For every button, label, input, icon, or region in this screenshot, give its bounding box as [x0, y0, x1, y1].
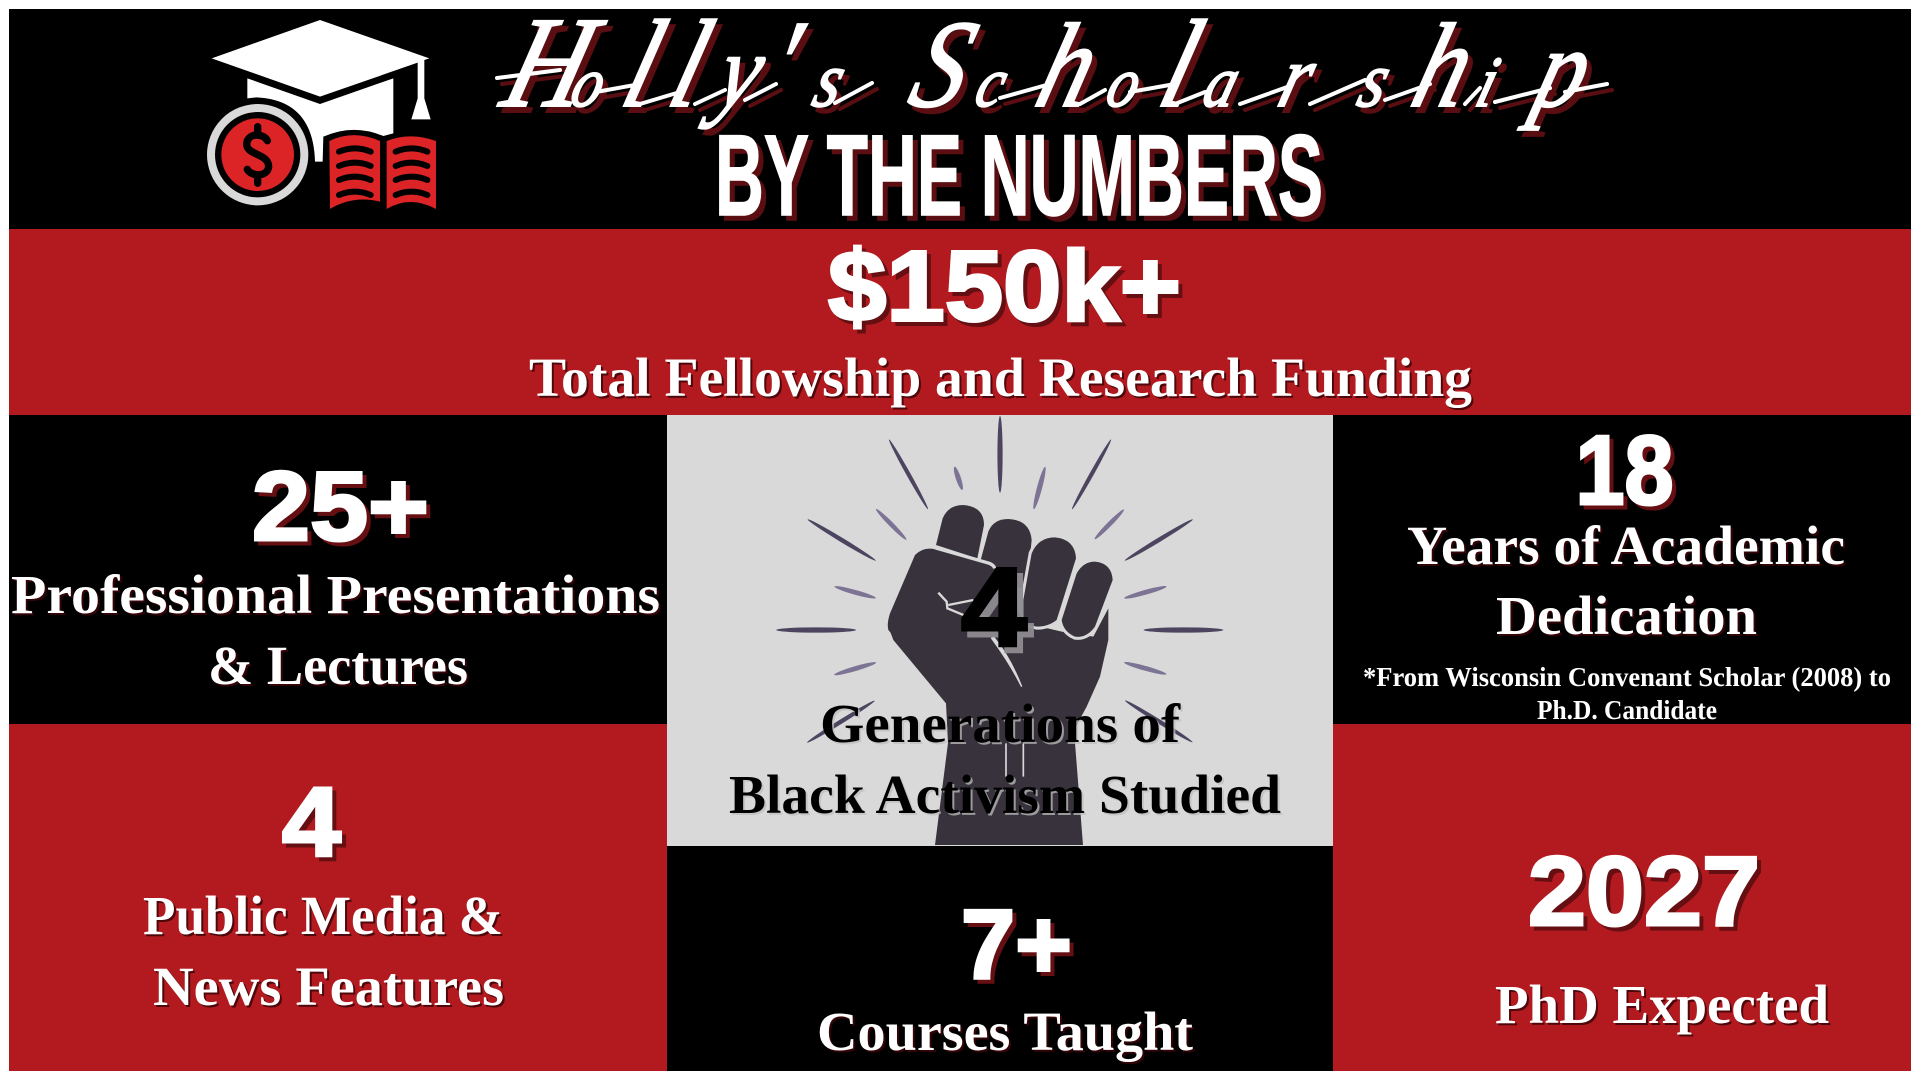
- presentations label: Professional Presentations: [11, 564, 660, 625]
- title script: r: [1269, 29, 1327, 126]
- panel: courses: [667, 846, 1333, 1071]
- courses number: 7+: [961, 889, 1072, 999]
- phd label: PhD Expected: [1495, 974, 1829, 1035]
- title script: a: [1196, 42, 1249, 122]
- phd year: 2027: [1528, 836, 1760, 946]
- panel: media: [9, 724, 667, 1071]
- title flourishes: [497, 70, 1607, 104]
- presentations label: [11, 564, 660, 696]
- years number: 18: [1576, 415, 1674, 525]
- media label: [143, 885, 504, 1017]
- title script: s: [1350, 38, 1400, 124]
- title script: y: [698, 12, 779, 129]
- panel: phd: [1333, 724, 1911, 1071]
- funding label: Total Fellowship and Research Funding: [529, 347, 1472, 408]
- years footnote: Ph.D. Candidate: [1537, 695, 1717, 725]
- title script: c: [968, 45, 1016, 122]
- presentations label: & Lectures: [208, 635, 468, 696]
- media number: 4: [282, 767, 341, 877]
- generations label: Generations of: [820, 693, 1181, 754]
- years label: Dedication: [1496, 585, 1757, 646]
- generations label: [729, 693, 1281, 825]
- media label: Public Media &: [143, 885, 503, 946]
- media label: News Features: [153, 956, 504, 1017]
- courses label: Courses Taught: [817, 1001, 1194, 1062]
- years label: Years of Academic: [1407, 515, 1845, 576]
- years footnote: *From Wisconsin Convenant Scholar (2008) to: [1363, 662, 1891, 692]
- title subtitle: BY THE NUMBERS: [715, 112, 1323, 240]
- panel: header: [9, 0, 1911, 240]
- fist and arm: [888, 505, 1113, 845]
- title script: h: [1400, 0, 1489, 132]
- title script: s: [805, 38, 855, 124]
- title script: h: [1024, 0, 1114, 132]
- title script: [488, 0, 1611, 134]
- years footnote: [1363, 662, 1891, 725]
- funding number: $150k+: [828, 230, 1181, 342]
- title script: o: [563, 45, 615, 122]
- panel: presentations: [9, 415, 667, 725]
- title script: i: [1469, 42, 1508, 122]
- title script: p: [1516, 7, 1606, 131]
- title script: o: [1099, 45, 1151, 122]
- rays: [776, 416, 1223, 744]
- presentations number: 25+: [252, 451, 429, 561]
- icon: raised fist: [776, 416, 1223, 845]
- years label: [1407, 515, 1845, 646]
- panel: generations: [667, 415, 1333, 846]
- panel: years: [1333, 415, 1911, 725]
- panel: funding: [9, 229, 1911, 415]
- generations number: 4: [961, 545, 1027, 670]
- icon: graduation cap, coin and book: [211, 20, 436, 209]
- generations label: Black Activism Studied: [729, 764, 1281, 825]
